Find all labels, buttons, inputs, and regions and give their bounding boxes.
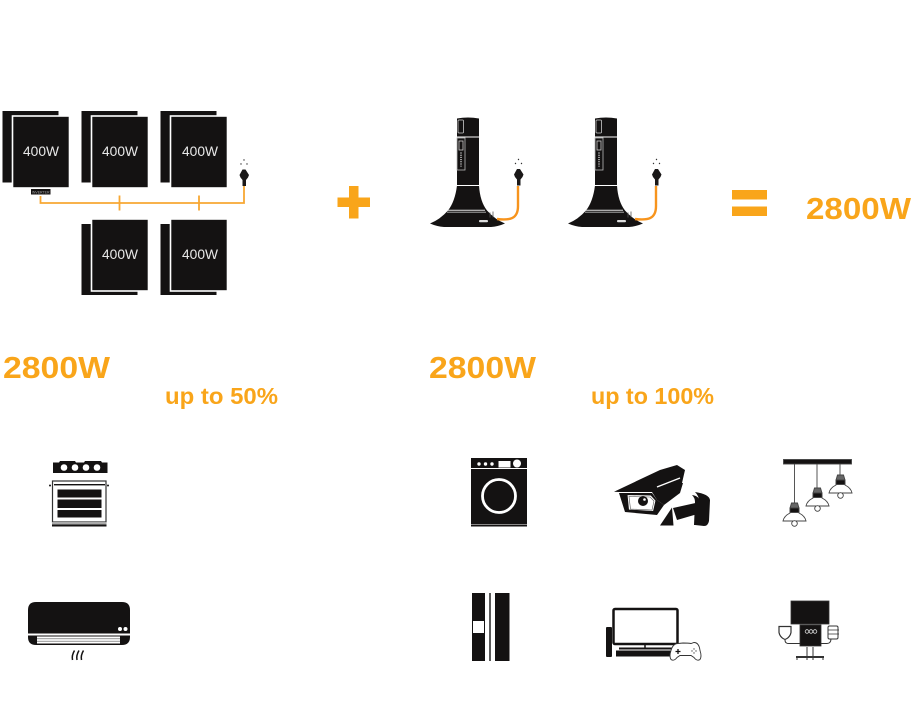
icon: oven [49,461,109,526]
icon: TV with game controller [606,609,701,660]
icon: security camera [614,465,710,526]
solar panel 2 [82,111,148,188]
solar panel 4 [82,219,148,295]
solar panel 5 [160,219,228,295]
icon: kitchen appliance set [779,601,839,660]
battery tower 2 with cable and plug [568,118,662,227]
solar panel 1: 400W [23,143,60,159]
orange wiring [40,185,244,210]
equals sign [732,190,767,216]
plus sign [338,186,370,218]
right caption: up to 100%: up to 100% [591,383,714,409]
icon: refrigerator [472,593,510,661]
solar array: five 400W panels [2,111,249,295]
solar panel 5: 400W [182,246,219,262]
solar panel 3: 400W [182,143,219,159]
icon: pendant lights [783,460,852,526]
solar panel 1 [2,111,70,188]
solar panel 2: 400W [102,143,139,159]
left caption: up to 50%: up to 50% [165,383,278,409]
solar panel 4: 400W [102,246,139,262]
battery tower 1 with cable and plug [430,118,524,227]
left heading: 2800W: 2800W [3,350,111,385]
right heading: 2800W: 2800W [429,350,537,385]
icon: air conditioner [28,602,130,660]
icon: washing machine [471,458,527,526]
inverter box [31,189,50,194]
solar panel 3 [160,111,228,188]
total output value: 2800W [806,191,912,226]
icon: wall plug [240,159,249,186]
inverter box: INVERTER [32,190,50,194]
